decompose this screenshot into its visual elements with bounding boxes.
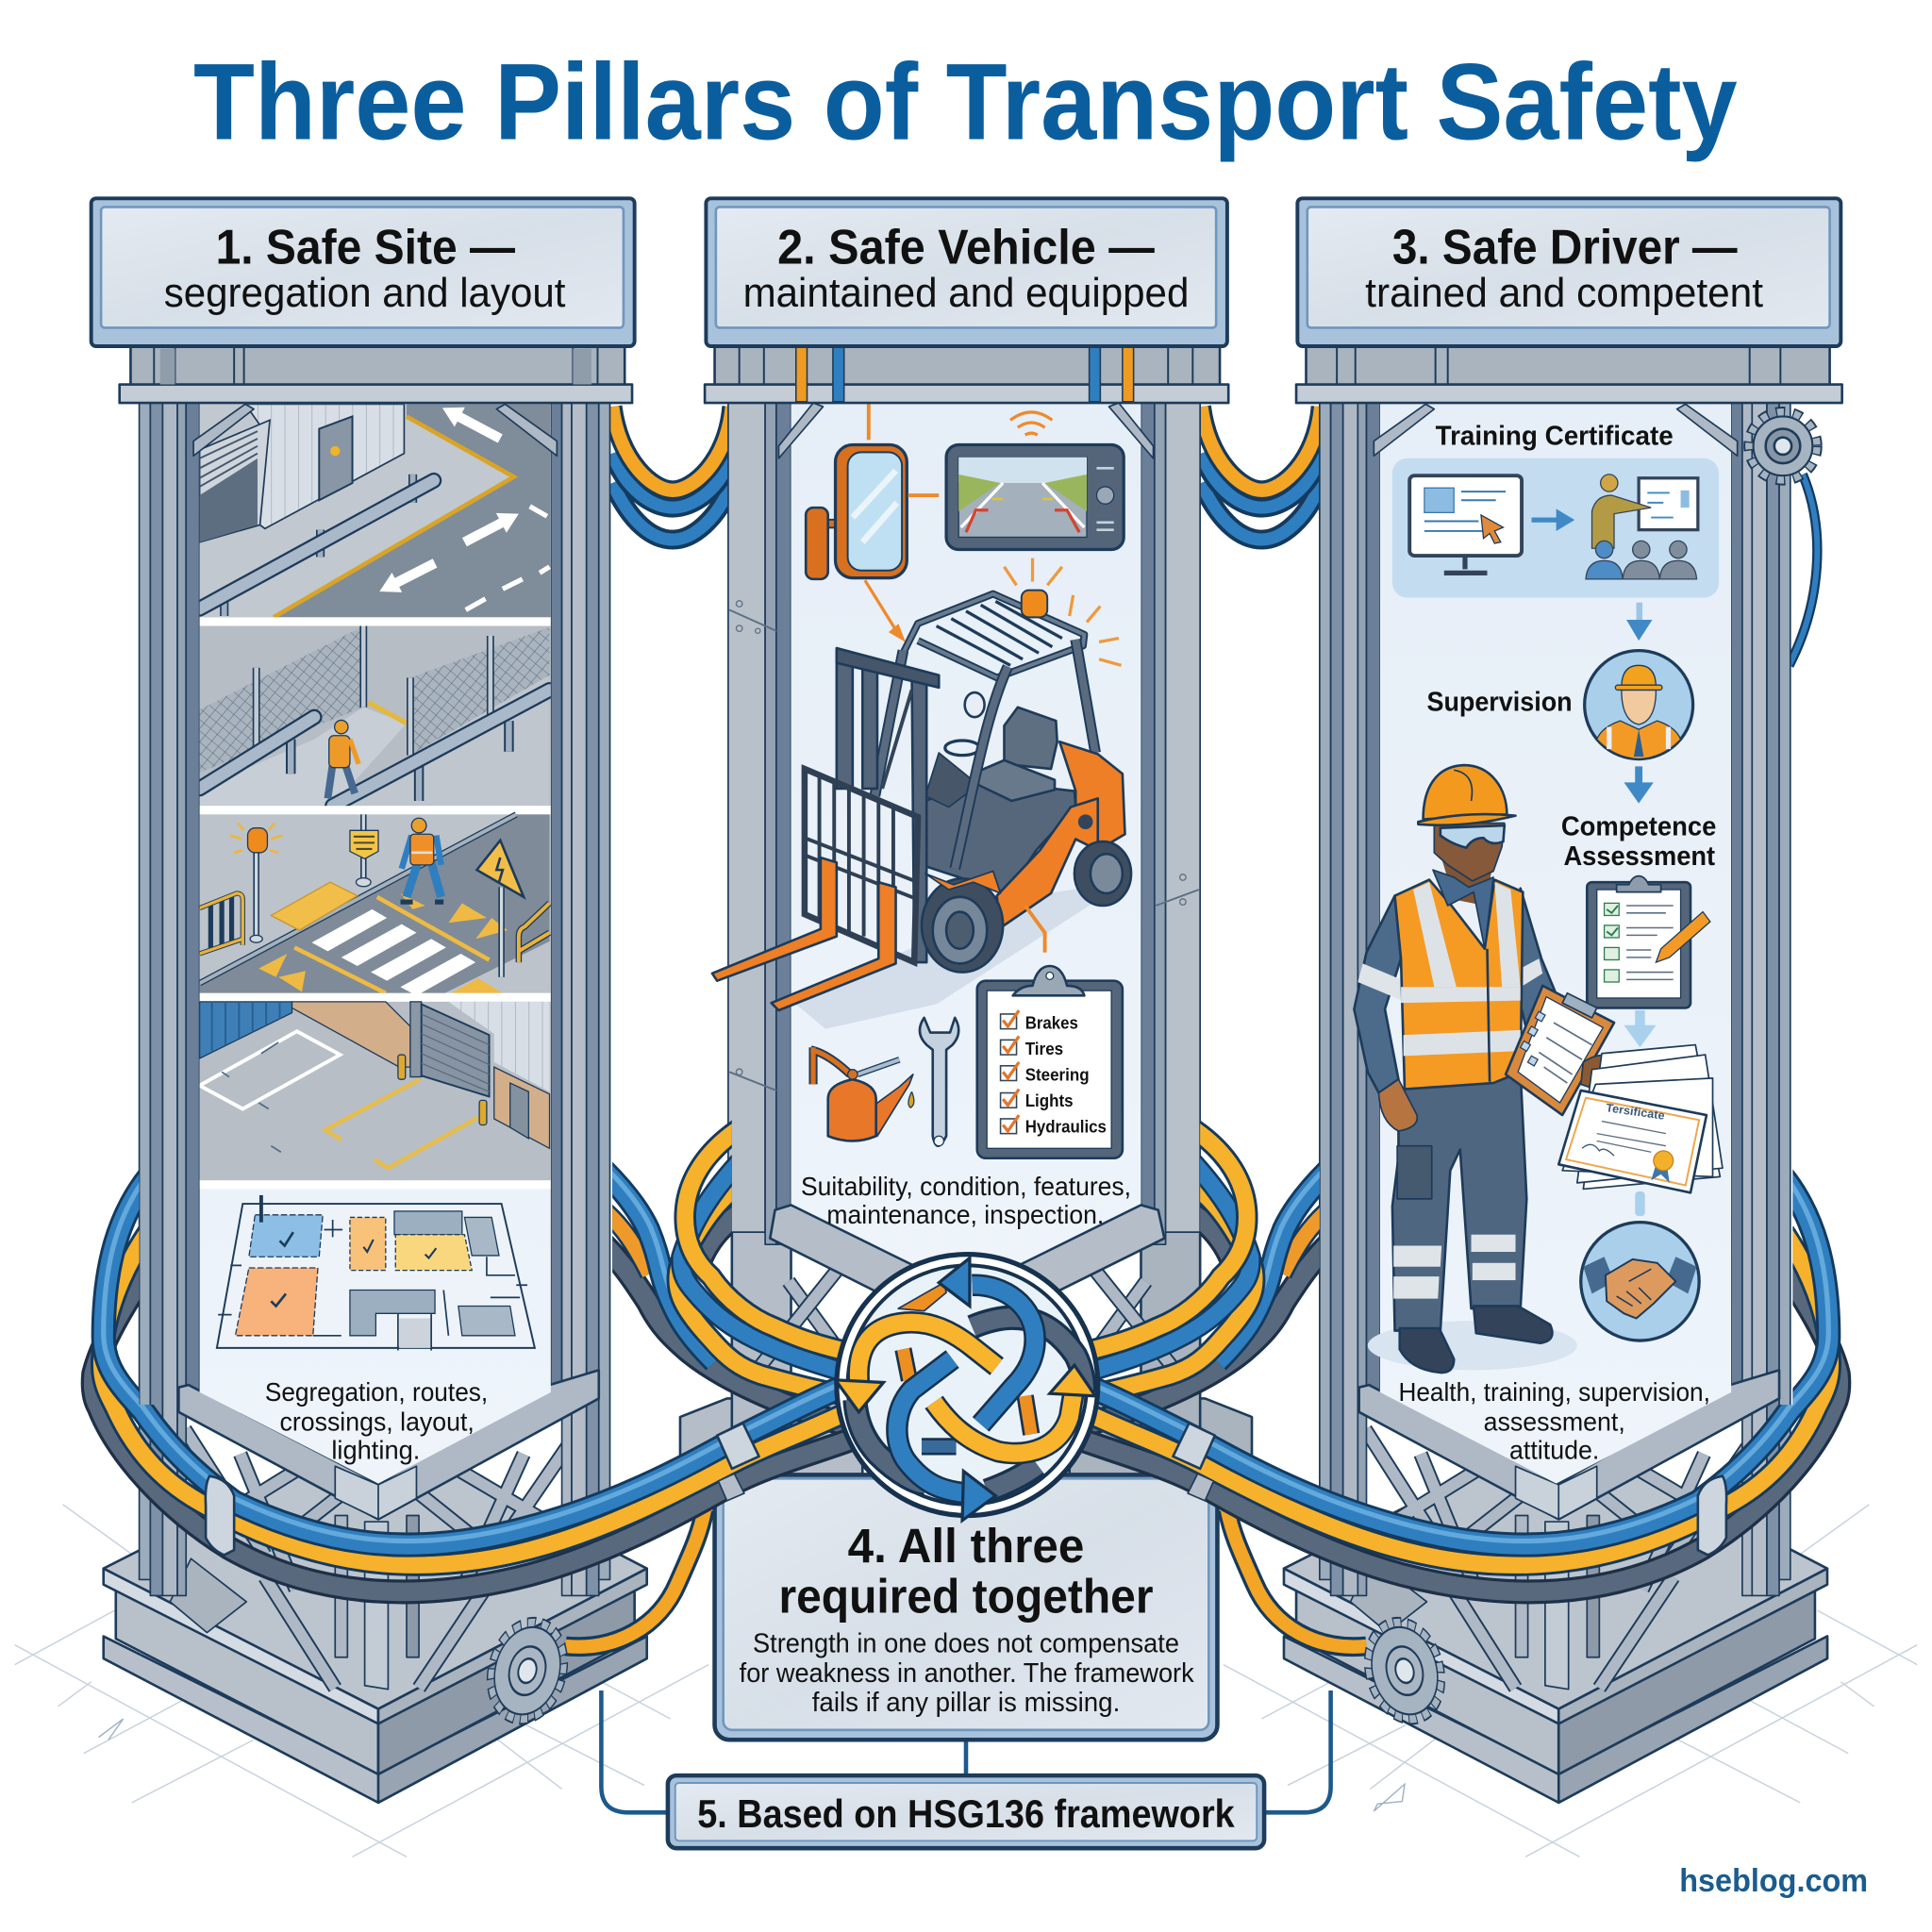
left cable bundle: [93, 1128, 874, 1591]
training certificate heading: Training Certificate: [1436, 422, 1674, 452]
icon: side mirror: [806, 403, 907, 579]
panel 1 illustrated strips: [200, 404, 551, 1351]
worker figure: [1354, 765, 1615, 1373]
heading: safe driver: [1297, 198, 1840, 346]
inspection checklist clipboard: Lights: [1025, 1091, 1074, 1110]
pillar 1 steel frame and base: [104, 394, 647, 1803]
left arm: [1354, 896, 1401, 1093]
barriers: [200, 893, 550, 962]
panel 2 background: [791, 404, 1141, 1306]
icon: supervisor: [1585, 651, 1693, 759]
dark arrow: [855, 1318, 1084, 1491]
warning sign: [476, 841, 524, 977]
orange feed cable right: [1227, 1509, 1366, 1647]
strip 2: pedestrian fence and guard rails: [200, 626, 551, 806]
inspection checklist clipboard: Steering: [1025, 1064, 1090, 1084]
held clipboard: [1506, 986, 1615, 1115]
callout text: 4. All three: [848, 1519, 1084, 1573]
panel 3 caption: assessment,: [1484, 1407, 1625, 1436]
pillar 2 to knot cables: [677, 1128, 862, 1398]
callout text: fails if any pillar is missing.: [812, 1688, 1120, 1718]
title: Three Pillars of Transport Safety: [193, 42, 1738, 163]
forklift illustration: [712, 558, 1131, 1029]
site credit: hseblog.com: [1679, 1863, 1868, 1899]
pillar 1 to knot cables: [604, 1168, 862, 1429]
top connecting cables pillar 1 to 2: [612, 407, 732, 540]
clamp centre left: [717, 1424, 759, 1501]
left lower loop cables: [93, 1167, 874, 1591]
beacon post: [230, 823, 282, 942]
strip 4: loading bay: [200, 1002, 551, 1180]
lattice struts: [170, 1429, 579, 1690]
seat and controls: [1004, 708, 1058, 769]
panel 1 caption: lighting.: [331, 1435, 420, 1464]
heading: safe vehicle: 2. Safe Vehicle —: [777, 221, 1156, 275]
pillar 2 columns and panel: [728, 394, 1200, 1337]
panel 3 caption: [1398, 1377, 1710, 1464]
front post and cab mirror: [955, 667, 1008, 869]
header beam pillar 2: [705, 342, 1228, 403]
site layout plan: [217, 1195, 535, 1351]
header beam pillar 3: [1296, 346, 1842, 403]
small pedestrian: [327, 720, 358, 798]
pillar 2 lower structure: [680, 1220, 1252, 1478]
separator: [200, 993, 551, 1002]
beacon: [1022, 591, 1047, 617]
safety goggles: [1441, 825, 1505, 848]
framework box: 5. Based on HSG136 framework: [697, 1791, 1235, 1836]
panel 1 caption: Segregation, routes,: [265, 1377, 488, 1407]
right cable bundle: [1058, 1128, 1839, 1591]
competence assessment label: Assessment: [1563, 841, 1716, 872]
heading: safe site: [92, 198, 635, 346]
arrow down faded: [1635, 1191, 1645, 1216]
hard hat: [1424, 765, 1507, 820]
chevron brace: [178, 1370, 599, 1519]
competence assessment label: Competence: [1561, 812, 1716, 842]
arrow: mirror to forklift: [865, 580, 905, 641]
gear top right: [1751, 414, 1815, 478]
inspection checklist clipboard: [977, 966, 1123, 1158]
icon: assessment clipboard: [1587, 876, 1710, 1008]
certificates stack: Tersificate: [1605, 1101, 1666, 1123]
cable to top right gear: [1789, 475, 1817, 665]
panel 2 caption: [801, 1172, 1131, 1229]
central interlocking knot: [836, 1255, 1098, 1521]
inspection checklist clipboard: Tires: [1025, 1039, 1063, 1058]
orange arrow: [898, 1283, 1031, 1434]
arrow down: [1624, 766, 1654, 804]
base gears with orange feed cables: [483, 1509, 1449, 1724]
icon: oil can: [810, 1047, 914, 1141]
clamp lower left: [206, 1476, 234, 1555]
separator: [200, 1180, 551, 1189]
panel 2 caption: maintenance, inspection.: [826, 1200, 1104, 1229]
heading: safe site: segregation and layout: [164, 271, 566, 316]
supervision label: Supervision: [1426, 688, 1573, 718]
vest: [1395, 880, 1523, 1090]
heading: safe vehicle: maintained and equipped: [743, 271, 1189, 316]
orange body: [1059, 741, 1124, 850]
icon: wrench: [920, 1018, 958, 1146]
separator: [200, 617, 551, 626]
front wheel and fender: [922, 878, 1003, 973]
arrow: [1532, 508, 1574, 531]
isometric floor grid: [15, 1505, 1917, 1857]
boots: [1400, 1328, 1454, 1373]
panel 2 chevron: [770, 1205, 1164, 1337]
panel 2 caption: Suitability, condition, features,: [801, 1172, 1131, 1201]
strip 3: pedestrian crossing: [200, 814, 551, 995]
heading: safe site: 1. Safe Site —: [216, 221, 516, 275]
arrow down: [1626, 603, 1653, 641]
panel 1 corner braces: [193, 404, 557, 456]
right arm: [1518, 889, 1562, 1030]
callout box: all three required together: [715, 1474, 1217, 1740]
sign post: [350, 814, 378, 887]
crossing pedestrian: [400, 818, 443, 902]
yellow arrow upper arc: [836, 1323, 997, 1412]
neck: [1440, 850, 1493, 906]
connector to checklist: [1025, 906, 1045, 953]
warning rays: [1004, 558, 1122, 665]
connector lines to framework box: [601, 1690, 1331, 1812]
yellow arrow lower arc: [934, 1365, 1095, 1453]
arrow down faded: [1624, 1010, 1656, 1047]
heading: safe driver: trained and competent: [1365, 271, 1763, 316]
wifi signal: [1010, 412, 1052, 435]
panel 1 caption: crossings, layout,: [279, 1407, 475, 1436]
overhead guard: [874, 594, 1095, 796]
inspection checklist clipboard: Brakes: [1025, 1013, 1078, 1033]
certificates stack: [1558, 1045, 1723, 1192]
icon: e-learning monitor: [1409, 475, 1522, 573]
pillar 3 steel frame and base: [1284, 394, 1827, 1803]
rear wheel: [1074, 841, 1131, 906]
callout text: required together: [778, 1570, 1154, 1624]
panel 3 caption: Health, training, supervision,: [1398, 1377, 1710, 1407]
callout text: [740, 1519, 1194, 1718]
head: [1434, 823, 1505, 881]
load backrest: [805, 769, 918, 962]
base block: [104, 1429, 647, 1803]
right column: [551, 394, 610, 1595]
gear left: [483, 1617, 572, 1724]
icon: handshake: [1581, 1223, 1699, 1341]
heading: safe driver: 3. Safe Driver —: [1392, 221, 1738, 275]
orange feed cable left: [566, 1509, 705, 1647]
left column: [140, 394, 200, 1595]
inspection checklist clipboard: Hydraulics: [1025, 1116, 1107, 1136]
icon: classroom presenter: [1586, 475, 1698, 579]
competence assessment label: [1561, 812, 1716, 872]
framework box: [668, 1775, 1264, 1848]
gear right: [1360, 1617, 1449, 1724]
forks: [712, 858, 837, 981]
mast: [837, 651, 853, 789]
callout text: Strength in one does not compensate: [753, 1629, 1179, 1659]
blue arrow lower arc: [897, 1359, 995, 1521]
panel 3 caption: attitude.: [1509, 1435, 1599, 1464]
top connecting cables pillar 2 to 3: [1201, 407, 1321, 540]
separator: [200, 806, 551, 814]
legs: [1392, 1072, 1526, 1331]
callout text: for weakness in another. The framework: [740, 1658, 1194, 1689]
blue arrow upper arc: [939, 1258, 1035, 1424]
strip 1: traffic route beside building: [200, 404, 551, 632]
panel 3 background: [1380, 404, 1731, 1484]
panel 1 caption: [265, 1377, 488, 1464]
heading: safe vehicle: [706, 198, 1227, 346]
panel 3 corner braces: [1374, 404, 1738, 456]
header beam pillar 1: [120, 346, 632, 403]
icon: reversing camera monitor: [908, 412, 1124, 550]
training block: [1392, 458, 1719, 597]
panel 1 background: [200, 404, 551, 1484]
collar and shirt: [1433, 870, 1493, 949]
